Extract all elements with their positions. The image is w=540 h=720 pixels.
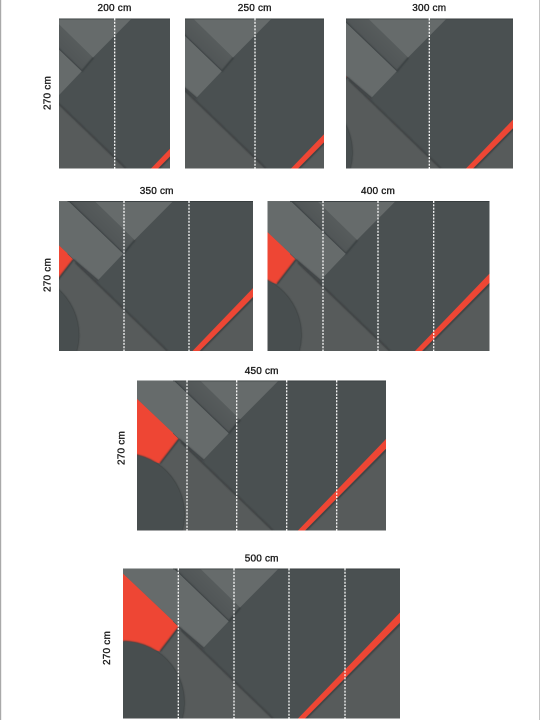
width label: 450 cm: 450 cm (245, 366, 279, 377)
width label: 300 cm: 300 cm (412, 3, 446, 14)
panel: 450 cm (116, 366, 400, 530)
left page edge (0, 0, 1, 720)
panel: 300 cm (291, 3, 540, 168)
height label: 270 cm: 270 cm (42, 76, 54, 110)
width label: 400 cm: 400 cm (361, 186, 395, 197)
panel: 250 cm (116, 3, 393, 168)
panel: 350 cm (18, 186, 294, 351)
right page edge (539, 0, 540, 720)
width label: 350 cm: 350 cm (140, 186, 174, 197)
wall design crop 500 (123, 568, 400, 718)
panel: 500 cm (102, 554, 400, 718)
height label: 270 cm: 270 cm (102, 631, 113, 665)
seam lines (178, 568, 345, 718)
height label: 270 cm: 270 cm (42, 258, 54, 292)
seam line (428, 18, 430, 168)
width label: 200 cm: 200 cm (98, 3, 132, 14)
wall design crop 250 (185, 18, 324, 168)
width label: 250 cm: 250 cm (238, 3, 272, 14)
height label: 270 cm: 270 cm (116, 431, 128, 465)
width label: 500 cm: 500 cm (245, 554, 279, 564)
seam lines (187, 380, 337, 530)
panel: 200 cm (0, 3, 253, 168)
wall design crop 350 (59, 201, 253, 351)
wall design crop 400 (268, 201, 490, 351)
seam line (114, 18, 116, 168)
wall design crop 450 (137, 380, 386, 530)
wall design crop 200 (59, 18, 170, 168)
seam lines (124, 201, 189, 351)
wall design crop 300 (346, 18, 513, 168)
seam line (254, 18, 256, 168)
panel: 400 cm (240, 186, 517, 351)
seam lines (323, 201, 434, 351)
